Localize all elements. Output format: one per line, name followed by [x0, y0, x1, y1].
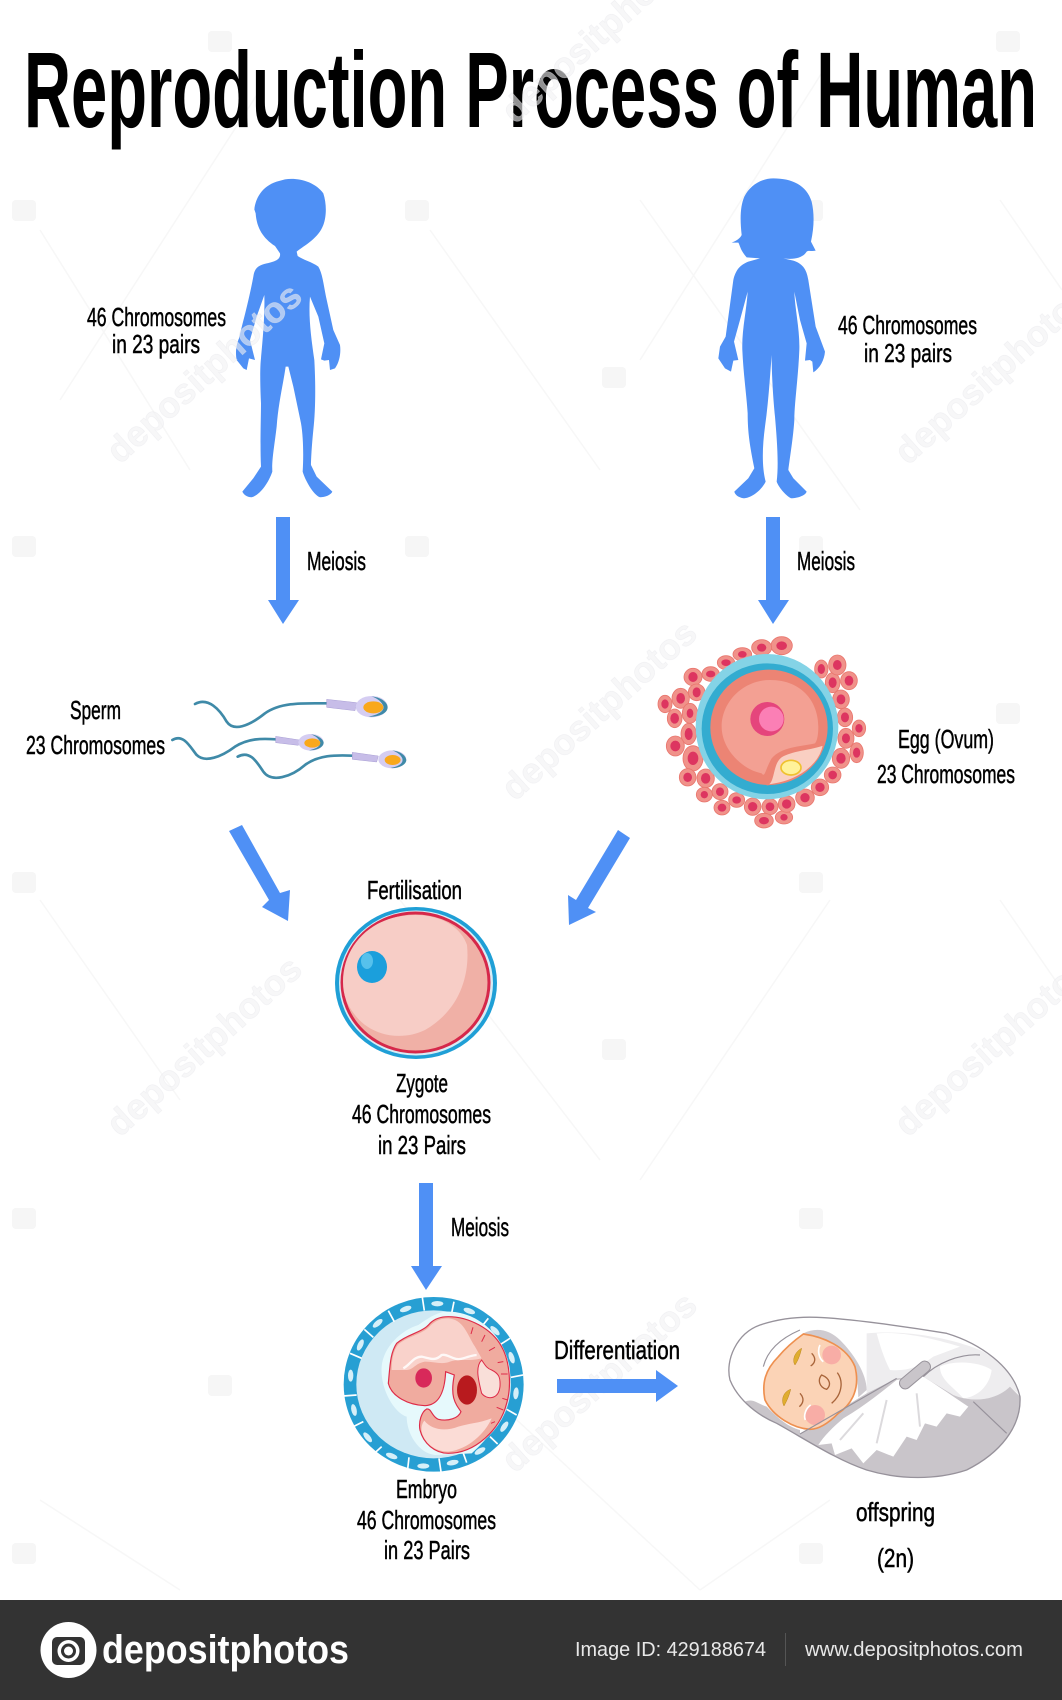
label: meiosis right: Meiosis — [797, 546, 855, 576]
label: meiosis left: Meiosis — [307, 546, 366, 576]
label: female chromosomes: in 23 pairs — [864, 338, 952, 368]
logo wordmark: depositphotos — [102, 1628, 349, 1672]
label: offspring: offspring — [856, 1497, 935, 1527]
arrow: sperm to zygote — [229, 825, 290, 921]
label: embryo — [357, 1474, 496, 1565]
arrow: egg to zygote — [568, 830, 630, 925]
icon: sperm cells — [172, 696, 406, 778]
text: depositphotos — [98, 948, 310, 1144]
website: www.depositphotos.com — [804, 1639, 1023, 1661]
arrow: female meiosis — [758, 517, 789, 624]
label: zygote: in 23 Pairs — [378, 1130, 466, 1160]
label: sperm — [26, 695, 165, 760]
label: egg: Egg (Ovum) — [898, 724, 994, 754]
label: differentiation: Differentiation — [554, 1335, 680, 1365]
arrow: male meiosis — [268, 517, 299, 624]
icon: male silhouette — [236, 179, 340, 497]
icon: female silhouette — [718, 178, 825, 498]
label: male chromosomes: 46 Chromosomes — [87, 302, 226, 332]
label: offspring: (2n) — [877, 1543, 914, 1573]
footer bar — [0, 1600, 1062, 1700]
label: male chromosomes: in 23 pairs — [112, 329, 200, 359]
text: depositphotos — [493, 1284, 705, 1480]
label: male chromosomes — [87, 302, 226, 359]
label: embryo: Embryo — [396, 1474, 457, 1504]
icon: zygote — [335, 907, 497, 1059]
label: embryo: in 23 Pairs — [384, 1535, 470, 1565]
arrow: zygote meiosis — [411, 1183, 442, 1290]
icon: camera logo — [40, 1622, 96, 1678]
label: zygote: 46 Chromosomes — [352, 1099, 491, 1129]
label: offspring — [856, 1497, 935, 1573]
label: egg — [877, 724, 1015, 789]
icon: embryo — [343, 1297, 524, 1472]
arrow: differentiation — [557, 1370, 678, 1402]
label: meiosis center: Meiosis — [451, 1212, 509, 1242]
label: sperm: Sperm — [70, 695, 121, 725]
label: zygote — [352, 1068, 491, 1160]
label: female chromosomes — [838, 310, 977, 368]
icon: egg ovum — [658, 637, 866, 828]
label: embryo: 46 Chromosomes — [357, 1505, 496, 1535]
icon: swaddled baby — [729, 1317, 1020, 1477]
text: depositphotos — [493, 612, 705, 808]
label: sperm: 23 Chromosomes — [26, 730, 165, 760]
text: depositphotos — [98, 275, 310, 471]
label: fertilisation: Fertilisation — [367, 875, 462, 905]
label: female chromosomes: 46 Chromosomes — [838, 310, 977, 340]
label: zygote: Zygote — [396, 1068, 448, 1098]
image id: Image ID: 429188674 — [575, 1639, 766, 1661]
